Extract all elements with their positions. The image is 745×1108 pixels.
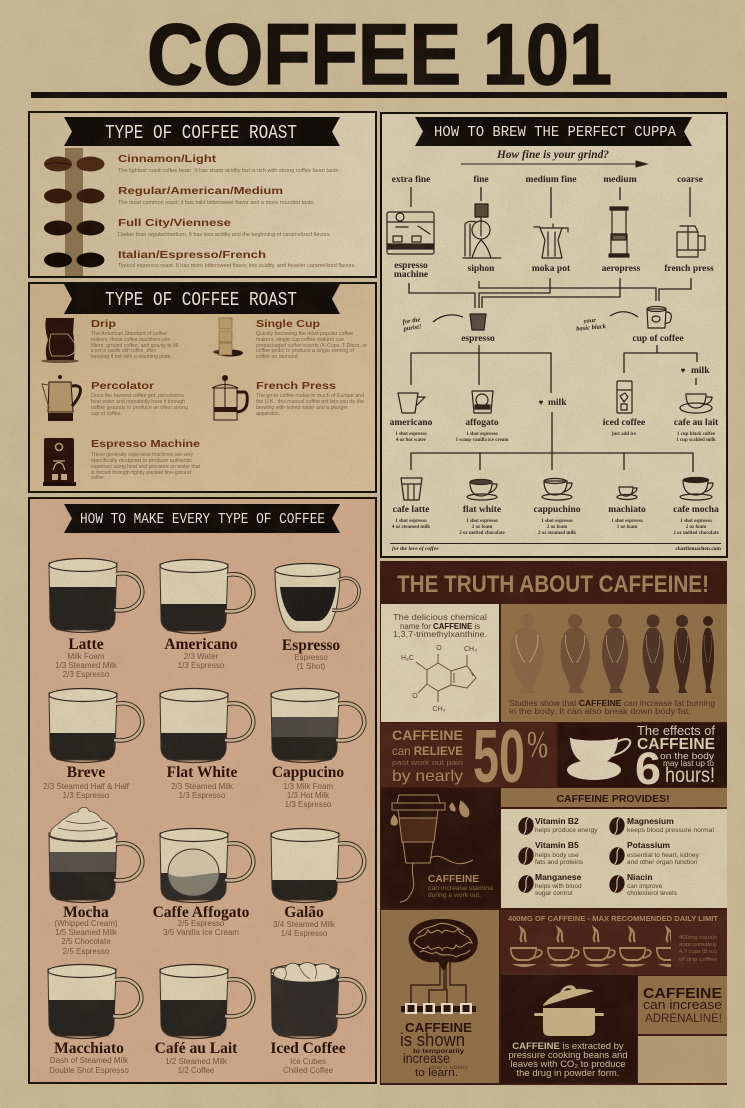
cell: stamina: can increase stamina — [428, 885, 493, 892]
drink: cappuchino text: 2 oz steamed milk — [538, 531, 576, 536]
cell: adrenaline: CAFFEINE — [643, 985, 722, 1002]
drink: cafe latte text: cafe latte — [393, 505, 429, 515]
molecule diagram — [401, 645, 477, 713]
drink: iced coffee: Iced Coffee — [270, 1040, 346, 1057]
panel: the truth about caffeine — [380, 561, 727, 1085]
band: caffeine provides: CAFFEINE PROVIDES! — [556, 793, 670, 805]
cell: effects last 6 hours: 6 — [635, 743, 661, 794]
cell: stamina: CAFFEINE — [428, 874, 479, 885]
cell: effects last 6 hours: may last up to — [663, 759, 715, 768]
nutrient: vitamin b5: helps body use — [535, 852, 579, 859]
drink: affogato text — [456, 418, 509, 443]
drink: espresso: Espresso — [294, 653, 328, 662]
icon: americano — [398, 393, 425, 413]
icon: espresso machine — [387, 212, 434, 254]
molecule diagram: O — [436, 645, 442, 652]
drink: cafe mocha text: 1 shot espresso — [680, 519, 712, 524]
label: milk branch: milk — [548, 398, 567, 408]
drink: galao: 1/4 Espresso — [281, 929, 328, 938]
icon: espresso machine — [43, 438, 76, 486]
drink: cafe latte text: 4 oz steamed milk — [392, 525, 430, 530]
brewer: percolator: cup of coffee. — [91, 411, 122, 417]
panel: how to brew the perfect cuppa — [381, 113, 727, 557]
cell: relieve pain 50 percent: 50 — [473, 714, 525, 798]
drink: cafe au lait: 1/2 Coffee — [178, 1066, 215, 1075]
cell: brain learning: to temporarily — [413, 1048, 464, 1055]
cell: brain learning: CAFFEINE — [405, 1020, 472, 1035]
drink: cappuchino text — [534, 505, 581, 536]
drink: machiato text: 1 shot espresso — [611, 519, 643, 524]
cell: fat burning: in the body. It can also break down body fat. — [509, 707, 691, 716]
nutrient: vitamin b5: Vitamin B5 — [535, 840, 579, 850]
drink: iced coffee: Chilled Coffee — [283, 1066, 334, 1075]
drink: iced coffee text: iced coffee — [603, 418, 645, 428]
cell: adrenaline: can increase — [643, 997, 722, 1012]
label: espresso machine: machine — [394, 270, 428, 280]
brewer: percolator: Once the favored coffee pot, percolators — [91, 393, 185, 399]
cell: extracted — [501, 975, 637, 1083]
drink: flat white text: 2 oz melted chocolate — [459, 531, 505, 536]
cell: chemical name — [381, 604, 499, 722]
brewer: drip: a pot or carafe with coffee, often — [91, 348, 156, 354]
heading banner: HOW TO MAKE EVERY TYPE OF COFFEE — [80, 511, 325, 528]
cell: effects last 6 hours: CAFFEINE — [637, 736, 715, 753]
roast: full city viennese — [44, 218, 331, 238]
footer credit — [390, 543, 721, 552]
drink: cappucino — [270, 688, 364, 809]
icon: cafe latte — [401, 478, 422, 500]
drink: espresso: (1 Shot) — [297, 662, 326, 671]
molecule diagram: CH₃ — [433, 706, 446, 713]
icon: pressure pot — [534, 985, 604, 1036]
footer credit: for the love of coffee — [392, 546, 439, 552]
nutrient: niacin: Niacin — [627, 872, 653, 882]
drink: iced coffee text: just add ice — [611, 432, 637, 437]
drink: macchiato: Dash of Steamed Milk — [50, 1056, 129, 1065]
cell: relieve pain 50 percent: past work out pain — [392, 758, 463, 767]
icon: siphon — [463, 204, 501, 258]
nutrient: potassium: Potassium — [627, 840, 670, 850]
brewer: single cup: makers, single cup coffee makers use — [256, 337, 344, 343]
icon: aeropress — [609, 207, 629, 257]
drink: cappuchino text: 2 oz foam — [547, 525, 568, 530]
footer credit: charliemachen.com — [675, 546, 721, 552]
drink: breve: 2/3 Steamed Half & Half — [43, 782, 130, 791]
roast: regular american medium — [44, 186, 315, 206]
brewer: espresso machine: coffee. — [91, 475, 105, 481]
brewer: drip: keeping it hot with a warming plate. — [91, 354, 172, 360]
drink: cafe au lait — [155, 964, 253, 1075]
drink: cappuchino text: 1 shot espresso — [541, 519, 573, 524]
label: siphon: siphon — [468, 264, 495, 274]
cell: brain learning: is shown — [400, 1030, 465, 1050]
label: milk branch right — [681, 366, 710, 376]
drink: galao — [270, 828, 364, 938]
brewer: espresso machine: specifically designed to produce authentic — [91, 458, 193, 464]
cell: effects last 6 hours: on the body — [660, 751, 714, 762]
label: aeropress: aeropress — [602, 264, 641, 274]
drink: cafe mocha text: cafe mocha — [673, 505, 719, 515]
icon: iced coffee — [617, 381, 632, 413]
icon: cafe mocha — [680, 478, 713, 500]
cell: chemical name: The delicious chemical — [393, 612, 487, 622]
drink: cappucino: Cappucino — [272, 764, 344, 781]
nutrient: manganese: Manganese — [535, 872, 582, 882]
nutrient: niacin: cholesterol levels — [627, 890, 678, 897]
drink: breve — [43, 688, 142, 800]
nutrient: magnesium — [607, 815, 715, 837]
drink: mocha: (Whipped Cream) — [54, 919, 118, 928]
drink: macchiato: Double Shot Espresso — [49, 1066, 129, 1075]
icon: espresso cup — [470, 314, 486, 330]
drink: cappucino: 1/3 Milk Foam — [283, 782, 333, 791]
drink: cafe au lait text: cafe au lait — [674, 418, 719, 428]
icon: single cup pods — [213, 318, 243, 356]
drink: flat white: 2/3 Steamed Milk — [171, 782, 234, 791]
drink: americano: 2/3 Water — [184, 652, 219, 661]
arrow: grind scale — [461, 161, 647, 167]
arrow: basic black — [610, 312, 638, 317]
cell: relieve pain 50 percent — [381, 714, 556, 798]
drink: machiato text: 1 oz foam — [617, 525, 638, 530]
cell: fat burning — [501, 604, 727, 722]
nutrient: manganese — [516, 872, 582, 897]
heading banner — [64, 284, 340, 314]
brewer: drip: The American Standard of coffee — [91, 331, 167, 337]
drink: breve: Breve — [67, 764, 105, 781]
drink: iced coffee text — [603, 418, 645, 437]
cell: adrenaline: ADRENALINE! — [645, 1011, 722, 1025]
nutrient: magnesium: Magnesium — [627, 816, 674, 826]
drink: mocha: 2/5 Chocolate — [61, 937, 111, 946]
drink: cafe mocha text — [673, 505, 719, 536]
drink: latte — [48, 558, 142, 679]
brewer: percolator: Percolator — [91, 381, 154, 392]
nutrient: niacin — [607, 872, 678, 897]
drink: machiato text — [608, 505, 646, 530]
drink: affogato text: 1 scoop vanilla ice cream — [456, 438, 509, 443]
panel: type of coffee roast (beans) — [29, 112, 376, 277]
note: your basic black: basic black — [576, 323, 607, 333]
drink: espresso — [275, 564, 359, 671]
drink: latte: 2/3 Espresso — [63, 670, 110, 679]
cell: nutrients — [501, 809, 727, 908]
icon: walking coffee cup — [391, 795, 473, 902]
cell: daily limit — [501, 910, 727, 975]
drink: macchiato: Macchiato — [54, 1040, 124, 1057]
brewer: single cup: Single Cup — [256, 319, 320, 330]
icon: percolator — [42, 375, 80, 421]
brewer: espresso machine: These generally expensive machines are very — [91, 452, 194, 458]
brewer: french press: the U.K., this manual coffee pot lets you do the — [256, 399, 364, 405]
brewer: single cup: prepackaged coffee inserts (K-Cups, T-Discs, or — [256, 343, 367, 349]
icon: drip machine — [41, 318, 79, 363]
drink: galao: Galão — [284, 904, 324, 921]
cell: extracted: leaves with CO₂ to produce — [510, 1059, 626, 1070]
grind labels: fine — [473, 175, 489, 185]
brewer: drip: makers, these coffee machines use — [91, 337, 170, 343]
drink: iced coffee: Ice Cubes — [290, 1057, 326, 1066]
drink: flat white: Flat White — [167, 764, 237, 781]
drink: americano text — [390, 418, 433, 443]
label: espresso machine: espresso — [394, 261, 428, 271]
grind labels: medium fine — [526, 175, 576, 185]
arrow: purist — [433, 315, 463, 322]
drink: caffe affogato: 3/5 Vanilla Ice Cream — [163, 928, 239, 937]
cell: relieve pain 50 percent: by nearly — [392, 768, 463, 785]
roast: cinnamon light: The lightest roast coffee bean. It has sharp acidity but is rich with strong coffee bean taste. — [118, 168, 340, 174]
cell: daily limit: approximately — [679, 942, 718, 948]
drink: cafe au lait text: 1 cup black coffee — [677, 432, 716, 437]
drink: caffe affogato: Caffe Affogato — [153, 904, 250, 921]
brewer: percolator: coffee grounds to produce an often strong — [91, 405, 188, 411]
roast: cinnamon light — [44, 154, 340, 174]
drink: breve: 1/3 Espresso — [63, 791, 110, 800]
grind question: How fine is your grind? — [496, 147, 609, 161]
drink: flat white: 1/3 Espresso — [179, 791, 226, 800]
icon: french press — [677, 226, 705, 257]
drink: cafe au lait text — [674, 418, 719, 443]
roast: regular american medium: Regular/American/Medium — [118, 186, 283, 197]
flow lines top — [409, 187, 691, 308]
brewer: espresso machine: Espresso Machine — [91, 439, 201, 450]
grind labels: medium — [603, 175, 637, 185]
heading banner — [415, 117, 692, 146]
drink: caffe affogato: 2/5 Espresso — [178, 919, 225, 928]
drink: affogato text: 1 shot espresso — [466, 432, 498, 437]
grind labels: extra fine — [392, 175, 430, 185]
roast: italian espresso french: Typical espresso roast. It has more bittersweet flavor, low acidity, and heavier caramelized flavors. — [118, 263, 356, 269]
drink: cafe mocha text: 2 oz melted chocolate — [673, 531, 719, 536]
note: for the purist: purist! — [402, 323, 422, 333]
drink: espresso: Espresso — [282, 637, 340, 654]
cell: adrenaline — [638, 976, 727, 1034]
drink: iced coffee — [270, 963, 364, 1075]
drink: mocha — [48, 807, 142, 956]
drink: americano: Americano — [164, 636, 238, 653]
cell: extracted: the drug in powder form. — [517, 1068, 619, 1079]
brewer: espresso machine: is forced through tightly packed fine-ground — [91, 470, 191, 476]
label: french press: french press — [664, 264, 714, 274]
nutrient: vitamin b5 — [516, 840, 584, 867]
roast: italian espresso french — [44, 250, 356, 269]
cell: extracted: pressure cooking beans and — [508, 1050, 628, 1061]
drink: cappucino: 1/3 Hot Milk — [287, 791, 330, 800]
drink: mocha: 1/5 Steamed Milk — [55, 928, 118, 937]
drink: flat white text: 2 oz foam — [472, 525, 493, 530]
drink: mocha: 2/5 Espresso — [63, 947, 110, 956]
brewer: drip: Drip — [91, 319, 116, 330]
nutrient: magnesium: keeps blood pressure normal — [627, 827, 715, 834]
drink: cafe mocha text: 2 oz foam — [686, 525, 707, 530]
grind labels — [392, 175, 703, 185]
icon: coffee cups — [510, 928, 688, 967]
label: espresso: espresso — [461, 334, 495, 344]
drink: flat white — [159, 688, 253, 800]
cell: brain learning: increase — [403, 1050, 450, 1066]
icon: machiato — [617, 487, 637, 500]
brewer: drip — [91, 319, 178, 360]
cell: relieve pain 50 percent: CAFFEINE — [392, 727, 463, 743]
icon: cup of coffee — [647, 306, 671, 328]
molecule diagram: CH₃ — [464, 646, 477, 653]
nutrient: potassium: essential to heart, kidney — [627, 852, 700, 859]
label: espresso machine — [394, 261, 428, 280]
nutrient: niacin: can improve — [627, 883, 663, 890]
drink: americano text: americano — [390, 418, 433, 428]
cell: stamina — [381, 788, 500, 908]
drink: americano text: 4 oz hot water — [396, 438, 427, 443]
icon: brain circuit — [401, 919, 478, 1014]
label: cup of coffee: cup of coffee — [632, 334, 684, 344]
label: milk branch right: ♥ — [681, 366, 686, 375]
note: your basic black: your — [582, 317, 597, 325]
note: for the purist — [401, 316, 422, 333]
drink: cafe au lait: 1/2 Steamed Milk — [165, 1057, 228, 1066]
drink: flat white text — [459, 505, 505, 536]
nutrient: potassium: and other organ function — [627, 859, 698, 866]
cell: brain learning: to learn. — [415, 1067, 458, 1079]
brewer: single cup: Quickly becoming the most popular coffee — [256, 331, 353, 337]
drink: latte: 1/3 Steamed Milk — [55, 661, 118, 670]
cell: effects last 6 hours — [558, 723, 727, 794]
brewer: percolator — [91, 381, 188, 417]
brewer: single cup: coffee pods) to produce a single serving of — [256, 348, 355, 354]
cell: daily limit: 400mg equals — [679, 935, 718, 941]
nutrient: manganese: helps with blood — [535, 883, 582, 890]
drink: latte: Latte — [68, 636, 104, 653]
flow lines middle — [411, 345, 697, 472]
brewer: french press: brewing with boiled water and a plunger — [256, 405, 348, 411]
drink: cafe latte text — [392, 505, 430, 530]
nutrient: vitamin b2: helps produce energy — [535, 827, 598, 834]
cell: effects last 6 hours: The effects of — [637, 723, 715, 738]
label: moka pot: moka pot — [532, 264, 571, 274]
icon: coffee cup — [567, 734, 630, 780]
drink: flat white text: flat white — [463, 505, 501, 515]
cell: relieve pain 50 percent: can RELIEVE — [392, 744, 463, 758]
heading banner: HOW TO BREW THE PERFECT CUPPA — [434, 124, 676, 141]
icon: cappuchino — [542, 478, 572, 500]
nutrient: vitamin b2 — [516, 815, 598, 837]
panel: type of coffee roast (brewers) — [29, 283, 376, 492]
cell: fat burning: Studies show that CAFFEINE can increase fat burning — [509, 699, 715, 708]
drink: cafe latte text: 1 shot espresso — [395, 519, 427, 524]
roast: italian espresso french: Italian/Espresso/French — [118, 250, 266, 261]
roast: cinnamon light: Cinnamon/Light — [118, 154, 217, 165]
drink: cafe au lait text: 1 cup scalded milk — [676, 438, 716, 443]
cell: brain learning: one's ability — [430, 1065, 469, 1071]
cell: daily limit: 4.7 cups (8-oz) — [679, 949, 717, 955]
cell: chemical name: name for CAFFEINE is — [400, 621, 480, 631]
nutrient: vitamin b2: Vitamin B2 — [535, 816, 579, 826]
icon: cafe au lait — [680, 394, 712, 413]
label: milk branch right: milk — [691, 366, 710, 376]
roast: full city viennese: Darker than regular/medium. It has less acidity and the beginning of caramelized flavors. — [118, 232, 331, 238]
icon: affogato — [472, 391, 493, 413]
brewer: percolator: heat water and repeatedly have it through — [91, 399, 185, 405]
brewer: drip: filters, ground coffee, and gravity to fill — [91, 343, 178, 349]
cell: stamina: during a work out. — [428, 892, 481, 899]
molecule diagram: O — [412, 693, 418, 700]
cell: extracted: CAFFEINE is extracted by — [512, 1041, 624, 1052]
brewer: espresso machine — [91, 439, 201, 481]
icon: flat white — [467, 480, 497, 500]
cell: effects last 6 hours: hours! — [665, 764, 715, 787]
heading banner: TYPE OF COFFEE ROAST — [105, 122, 297, 144]
brewer: french press — [256, 381, 364, 417]
drink: americano — [159, 560, 253, 670]
drink: mocha: Mocha — [63, 904, 109, 921]
heading banner — [64, 504, 340, 533]
roast: regular american medium: The most common roast; it has mild bittersweet flavor and a more rounded taste. — [118, 200, 315, 206]
title: COFFEE 101 — [147, 7, 612, 103]
heading banner: TYPE OF COFFEE ROAST — [105, 289, 297, 311]
panel: how to make every type of coffee — [29, 498, 376, 1083]
nutrient: manganese: sugar control — [535, 890, 573, 897]
brewer: french press: French Press — [256, 381, 337, 392]
label: milk branch — [539, 398, 567, 408]
figure: silhouettes — [511, 614, 714, 693]
drink: americano: 1/3 Espresso — [178, 661, 225, 670]
cell: relieve pain 50 percent: % — [527, 724, 548, 766]
drink: latte: Milk Foam — [68, 652, 105, 661]
roast: full city viennese: Full City/Viennese — [118, 218, 232, 229]
drink: americano text: 1 shot espresso — [395, 432, 427, 437]
drink: caffe affogato — [153, 828, 253, 937]
note: your basic black — [575, 316, 607, 333]
drink: macchiato — [47, 964, 141, 1075]
cell: daily limit: of drip coffee — [679, 957, 717, 963]
icon: french press — [212, 375, 247, 420]
cell: brain learning — [381, 910, 499, 1083]
drink: affogato text: affogato — [465, 418, 499, 428]
icon: moka pot — [534, 224, 568, 258]
heading banner — [64, 117, 340, 146]
grind labels: coarse — [677, 175, 703, 185]
nutrient: potassium — [607, 840, 700, 867]
cell: daily limit: 400MG OF CAFFEINE - MAX RECOMMENDED DAILY LIMIT — [508, 916, 719, 923]
drink: cappuchino text: cappuchino — [534, 505, 581, 515]
drink: cafe au lait: Café au Lait — [155, 1040, 238, 1057]
cell: chemical name: 1,3,7-trimethylxanthine. — [393, 629, 487, 639]
note: for the purist: for the — [402, 316, 421, 326]
band: caffeine provides — [501, 788, 727, 807]
drink: cappucino: 1/3 Espresso — [285, 800, 332, 809]
drink: machiato text: machiato — [608, 505, 646, 515]
drink: galao: 3/4 Steamed Milk — [273, 920, 336, 929]
drink: flat white text: 1 shot espresso — [466, 519, 498, 524]
brewer: single cup: coffee on demand. — [256, 354, 299, 360]
molecule diagram: H₃C — [401, 655, 414, 662]
brewer: espresso machine: espresso using heat and pressure on water that — [91, 464, 201, 470]
brewer: single cup — [256, 319, 367, 360]
brewer: french press: apparatus. — [256, 411, 280, 417]
nutrient: vitamin b5: fats and proteins — [535, 859, 584, 866]
label: milk branch: ♥ — [539, 398, 544, 407]
brewer: french press: The go-to coffee maker in much of Europe and — [256, 393, 364, 399]
